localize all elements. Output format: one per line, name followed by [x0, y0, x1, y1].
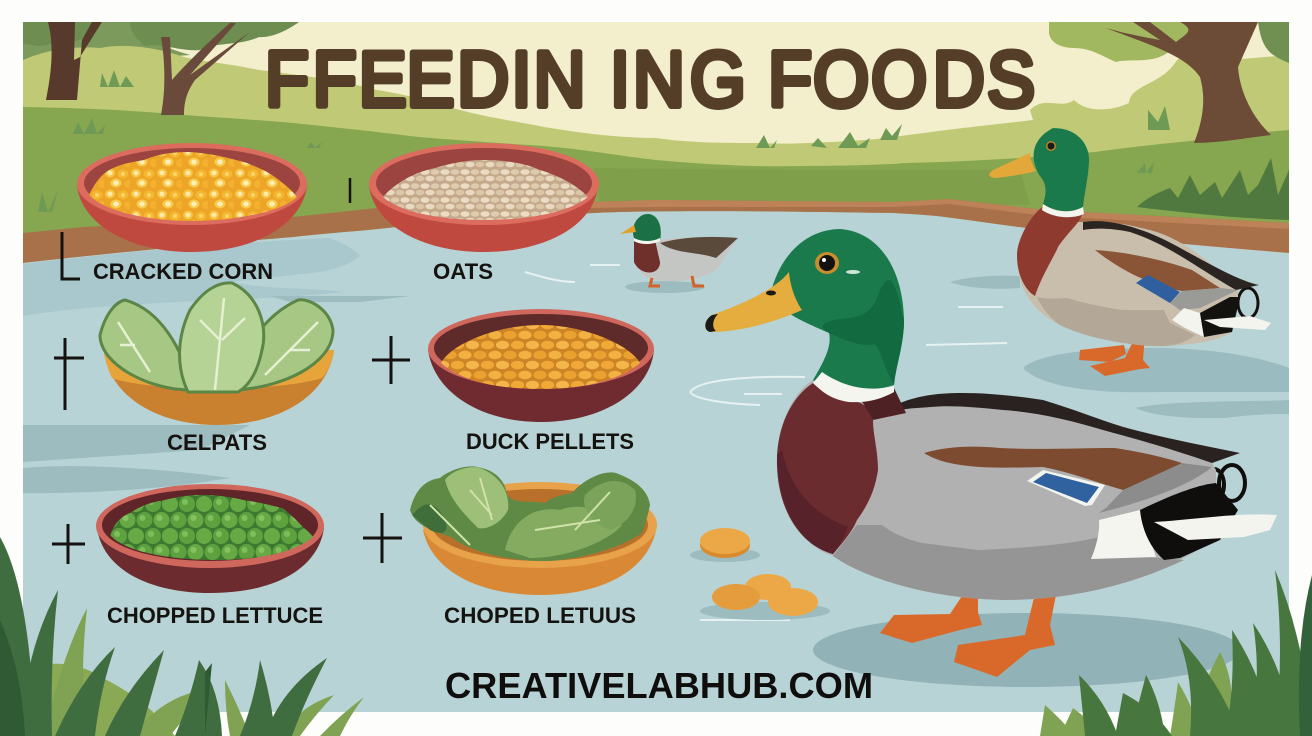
grass tufts — [38, 70, 1170, 212]
grass left corner — [0, 537, 364, 736]
pellets on the water — [690, 528, 830, 620]
pond — [23, 199, 1289, 712]
bowl: oats — [369, 143, 599, 252]
food labels: CHOPED LETUUS — [444, 603, 636, 628]
food labels — [93, 259, 636, 628]
bowl: cracked corn — [77, 143, 307, 252]
bowl: duck pellets — [428, 309, 654, 422]
food labels: DUCK PELLETS — [466, 429, 634, 454]
bowl: chopped lettuce leaves — [410, 466, 657, 595]
upper right duck — [989, 128, 1271, 376]
food labels: CELPATS — [167, 430, 267, 455]
bowl: peas — [96, 484, 324, 593]
large duck — [705, 229, 1277, 687]
food labels: OATS — [433, 259, 493, 284]
food labels: CHOPPED LETTUCE — [107, 603, 323, 628]
website url: CREATIVELABHUB.COM — [445, 665, 873, 706]
food labels: CRACKED CORN — [93, 259, 273, 284]
grass right corner — [1040, 570, 1312, 736]
pond bank — [23, 199, 1289, 263]
small duck — [620, 214, 738, 293]
title: FFEEDIN ING FOODS — [265, 35, 1035, 123]
stray marks — [52, 178, 410, 564]
background: sky and hills — [23, 22, 1289, 262]
bowl: celpats leaves — [100, 283, 334, 425]
trees — [23, 22, 1289, 220]
